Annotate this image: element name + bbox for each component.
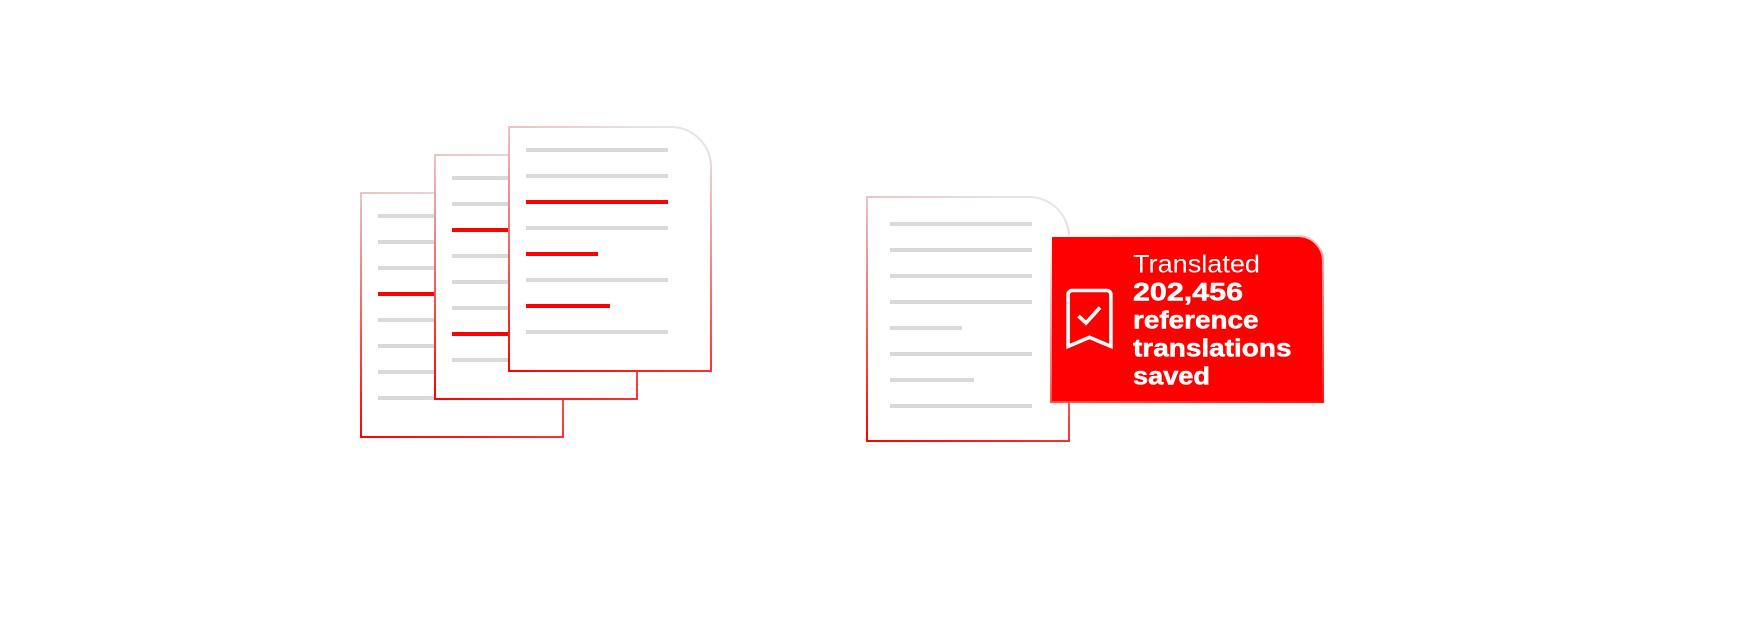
- callout text: Translated: [1133, 251, 1260, 279]
- document: front page: [509, 127, 711, 371]
- callout text: 202,456: [1133, 279, 1243, 307]
- document: back page: [361, 193, 563, 437]
- callout text: [1133, 251, 1292, 391]
- callout background: [1051, 236, 1323, 402]
- callout text: reference: [1133, 307, 1259, 335]
- translated result document: [867, 197, 1069, 441]
- icon: bookmark with check mark: [1068, 290, 1111, 346]
- callout text: translations: [1133, 335, 1292, 363]
- document stack: original documents: [361, 127, 711, 437]
- callout text: saved: [1133, 363, 1210, 391]
- document: middle page: [435, 155, 637, 399]
- callout: translations saved: [1051, 236, 1323, 402]
